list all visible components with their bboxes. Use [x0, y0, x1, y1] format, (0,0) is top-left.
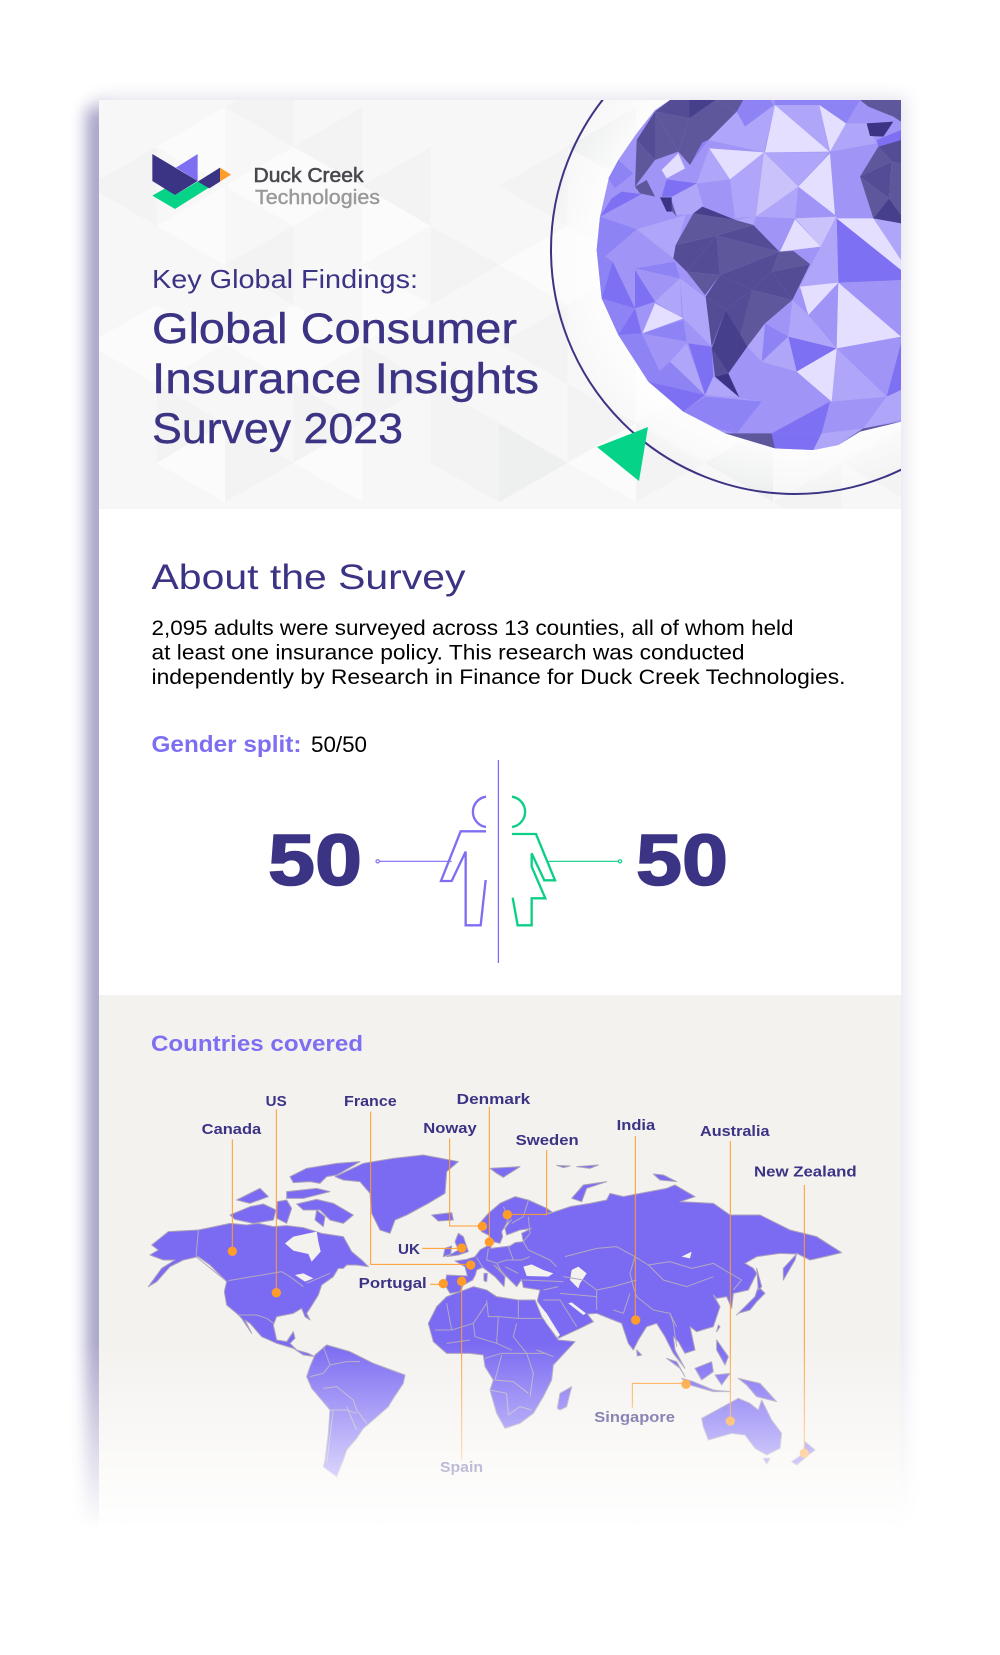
panel: page background	[99, 100, 901, 1555]
heading: about the survey: About the Survey	[152, 558, 466, 597]
map country labels: UK	[398, 1241, 420, 1258]
icon: male half figure	[376, 797, 486, 925]
map country labels	[202, 1091, 857, 1476]
gender split label	[152, 731, 367, 757]
centre axis	[497, 760, 499, 963]
panel: header	[99, 100, 901, 509]
gender split label: Gender split:	[152, 731, 302, 757]
header subtitle: Key Global Findings:	[152, 264, 418, 294]
map country labels: New Zealand	[754, 1164, 857, 1181]
map country labels: Denmark	[457, 1091, 531, 1108]
panel shadow	[86, 96, 906, 1552]
infographic canvas	[76, 92, 909, 1512]
about text block: independently by Research in Finance for Duck Creek Technologies.	[152, 666, 846, 689]
logo wordmark	[254, 165, 380, 209]
green triangle	[597, 427, 648, 481]
logo icon	[152, 154, 231, 209]
map country labels: Spain	[440, 1459, 483, 1476]
logo wordmark: Technologies	[255, 187, 380, 209]
panel: countries covered	[99, 995, 901, 1555]
map country labels: Sweden	[516, 1132, 579, 1149]
map leader lines and markers	[228, 1107, 809, 1459]
header title: Survey 2023	[152, 405, 403, 453]
heading: countries covered: Countries covered	[151, 1031, 363, 1056]
map country labels: Portugal	[359, 1275, 427, 1292]
map country labels: US	[266, 1093, 287, 1110]
header title	[152, 305, 539, 453]
header title: Insurance Insights	[152, 355, 539, 403]
logo wordmark: Duck Creek	[254, 165, 365, 187]
icon: female half figure	[512, 797, 622, 925]
world map	[148, 1155, 842, 1477]
map country labels: Singapore	[594, 1409, 675, 1426]
map country labels: Australia	[700, 1123, 770, 1140]
about text block	[152, 617, 846, 689]
map country labels: Noway	[423, 1120, 477, 1137]
header title: Global Consumer	[152, 305, 517, 353]
map country labels: France	[344, 1093, 397, 1110]
map country labels: India	[617, 1117, 656, 1134]
about text block: at least one insurance policy. This research was conducted	[152, 642, 744, 664]
map country labels: Canada	[202, 1121, 262, 1138]
right number 50: 50	[636, 821, 728, 901]
left number 50: 50	[268, 821, 362, 901]
about text block: 2,095 adults were surveyed across 13 counties, all of whom held	[152, 617, 794, 640]
bottom white fade	[0, 1344, 1000, 1655]
orbit ring	[550, 100, 901, 495]
gender split label: 50/50	[311, 732, 367, 757]
globe	[597, 100, 901, 450]
